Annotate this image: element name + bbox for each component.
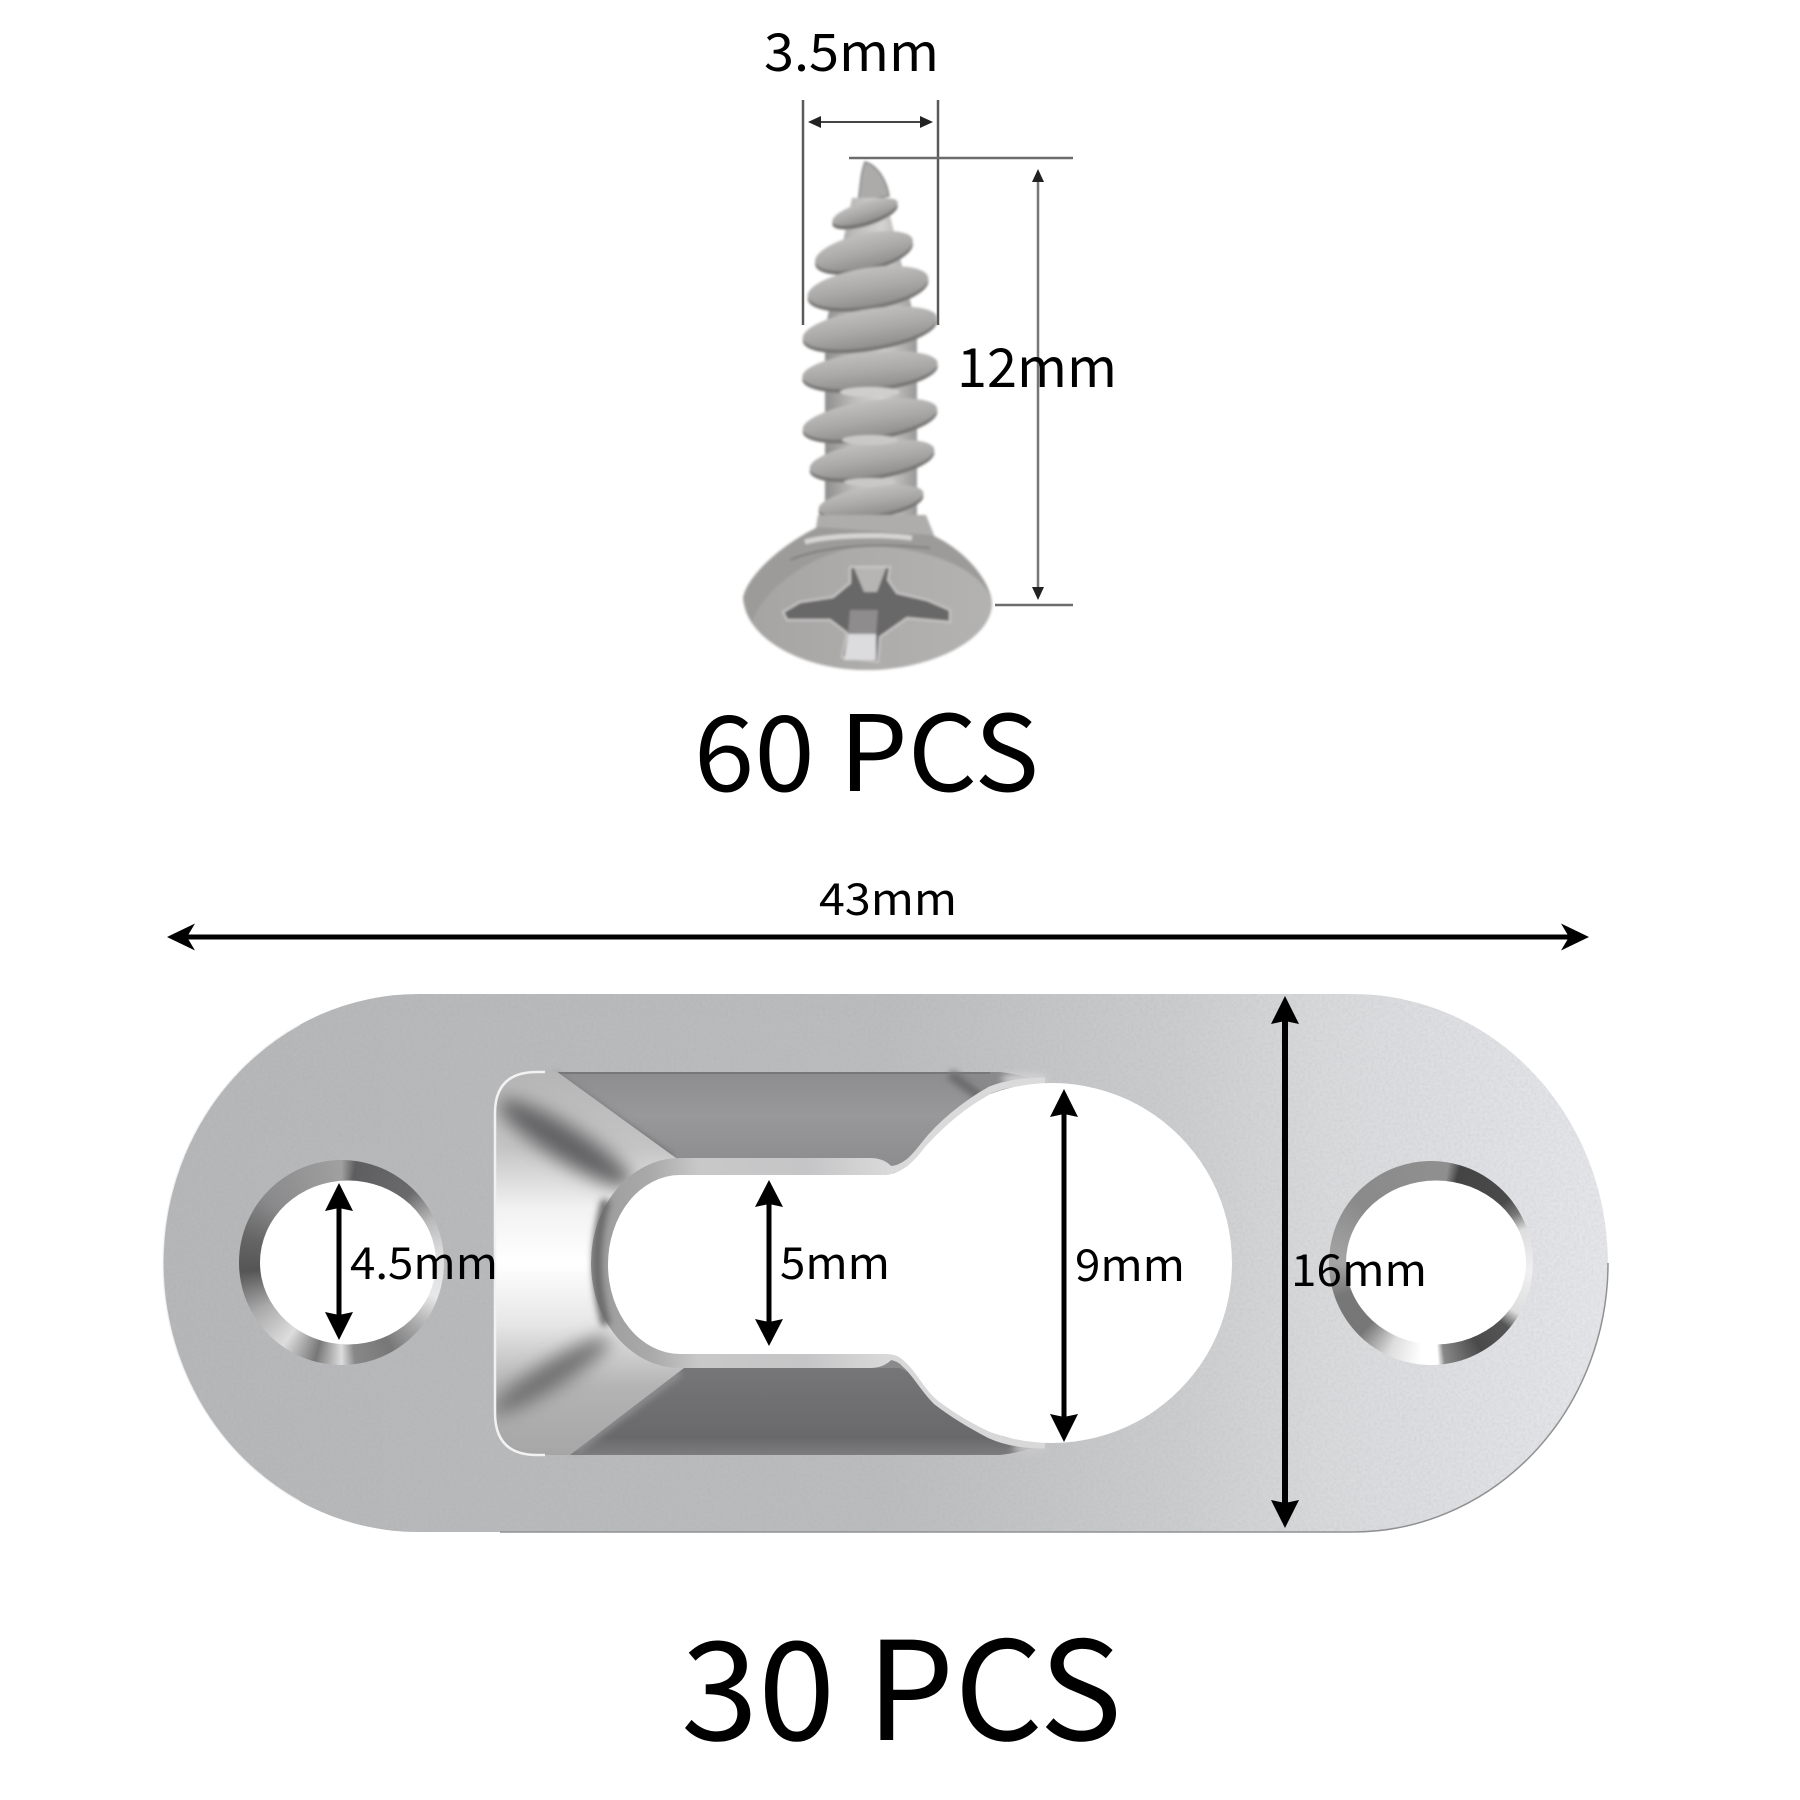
- lower ramp: [570, 1368, 1045, 1455]
- screw illustration: [743, 162, 992, 670]
- keyhole opening: [608, 1083, 1232, 1443]
- left wall with reflections: [496, 1071, 684, 1455]
- screw tip: [858, 162, 889, 202]
- screw threads: [800, 192, 940, 527]
- label: 16mm: 16mm: [1291, 1235, 1427, 1299]
- shaft highlights between threads: [840, 387, 900, 397]
- screw dimension lines: [803, 100, 1073, 605]
- length extension lines: [849, 158, 1073, 605]
- recess left edge highlight: [495, 1072, 545, 1455]
- label: 60 PCS: 60 PCS: [694, 670, 1039, 822]
- dimension arrow: 16mm: [1271, 996, 1299, 1528]
- label: 5mm: 5mm: [780, 1228, 890, 1292]
- phillips recess: [783, 567, 950, 662]
- 12mm length arrow: [1032, 169, 1044, 600]
- screw shaft: [825, 198, 917, 530]
- 3.5mm extension lines: [803, 100, 938, 325]
- dimension arrow: 9mm: [1050, 1089, 1078, 1442]
- left mounting hole: [239, 1160, 444, 1365]
- 3.5mm width arrow: [808, 116, 933, 128]
- label: 4.5mm: 4.5mm: [350, 1228, 498, 1292]
- plate texture: [1240, 994, 1607, 1530]
- upper ramp: [556, 1074, 985, 1170]
- stamped recess: [484, 1051, 1232, 1455]
- label: 30 PCS: 30 PCS: [681, 1582, 1122, 1780]
- slot lip: [591, 1158, 893, 1368]
- label: 9mm: 9mm: [1075, 1230, 1185, 1294]
- overall width arrow: [167, 924, 1589, 950]
- label: 43mm: 43mm: [819, 864, 957, 928]
- right mounting hole: [1329, 1161, 1533, 1365]
- dimension arrow: 4.5mm: [325, 1183, 353, 1340]
- screw head: [743, 515, 992, 670]
- dimension arrow: 5mm: [755, 1180, 783, 1346]
- plate body: [163, 994, 1608, 1532]
- keyhole plate: [163, 994, 1608, 1532]
- neck lip edges: [887, 1081, 1045, 1170]
- label: 3.5mm: 3.5mm: [764, 11, 939, 86]
- label: 12mm: 12mm: [957, 324, 1117, 403]
